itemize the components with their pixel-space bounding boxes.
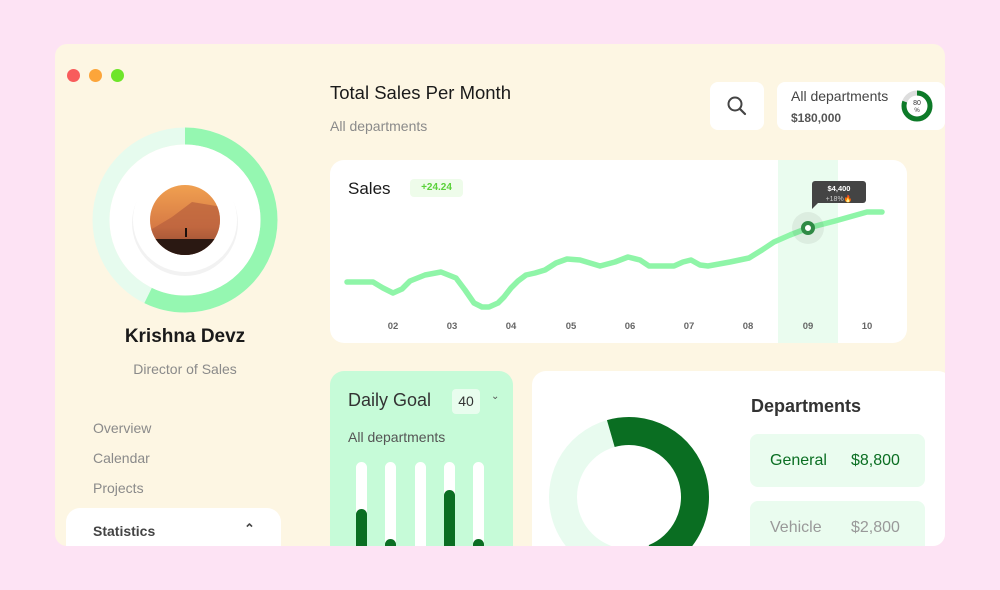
- total card: All departments: [791, 88, 888, 104]
- sales chart panel: $4,400: [828, 184, 850, 193]
- total card: [777, 82, 945, 130]
- daily goal panel: 40: [458, 393, 474, 409]
- statistics tab: Statistics: [93, 523, 155, 539]
- window dots: [67, 69, 124, 82]
- badge: [410, 179, 463, 197]
- name: Krishna Devz: [125, 326, 245, 347]
- sales chart panel: 03: [447, 321, 457, 332]
- search button: [710, 82, 764, 130]
- title: Total Sales Per Month: [330, 82, 511, 103]
- sales chart panel: 08: [743, 321, 753, 332]
- nav menu: Calendar: [93, 450, 150, 466]
- daily goal panel: Daily Goal: [348, 390, 431, 410]
- vehicle row: Vehicle: [770, 519, 822, 536]
- window card: [55, 44, 945, 546]
- sales chart panel: 06: [625, 321, 635, 332]
- role: Director of Sales: [133, 361, 237, 377]
- vehicle row: [750, 501, 925, 554]
- sales chart panel: 05: [566, 321, 577, 332]
- bars: [356, 462, 484, 546]
- sales chart panel: [330, 160, 907, 343]
- departments donut: [549, 417, 709, 546]
- sales chart panel: 07: [684, 321, 694, 332]
- badge: +24.24: [421, 182, 452, 193]
- daily goal panel: ⌄: [491, 391, 499, 402]
- statistics tab: ⌃: [244, 521, 255, 536]
- sales chart panel: 10: [862, 321, 872, 332]
- sales chart panel: 09: [803, 321, 813, 332]
- daily goal panel: All departments: [348, 429, 445, 445]
- general row: [750, 434, 925, 487]
- departments panel: [532, 371, 952, 571]
- sales chart panel: 04: [506, 321, 517, 332]
- nav menu: Projects: [93, 480, 144, 496]
- statistics tab: [66, 508, 281, 568]
- tooltip: [812, 181, 866, 203]
- nav menu: Overview: [93, 420, 151, 436]
- vehicle row: $2,800: [851, 519, 900, 536]
- total card: $180,000: [791, 111, 841, 125]
- line: [347, 212, 882, 307]
- sales chart panel: 02: [388, 321, 398, 332]
- general row: General: [770, 452, 827, 469]
- nav menu: [93, 420, 152, 496]
- sales chart panel: +18%🔥: [826, 194, 852, 203]
- avatar ring: [92, 128, 278, 312]
- daily goal panel: [330, 371, 513, 561]
- departments panel: Departments: [751, 396, 861, 416]
- subtitle: All departments: [330, 118, 427, 134]
- general row: $8,800: [851, 452, 900, 469]
- donut 80%: [902, 90, 932, 122]
- donut 80%: %: [914, 108, 920, 114]
- sales chart panel: Sales: [348, 179, 391, 198]
- donut 80%: 80: [913, 100, 921, 107]
